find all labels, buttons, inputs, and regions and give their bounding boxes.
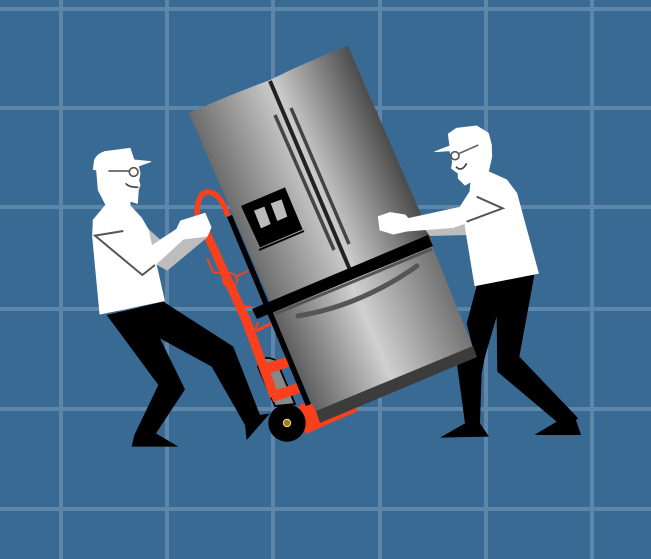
hand truck — [197, 192, 358, 442]
fridge middle band — [252, 235, 433, 319]
hand truck base plate — [298, 403, 358, 434]
hand truck cross bars — [259, 357, 300, 402]
right mover legs — [440, 272, 581, 438]
refrigerator — [189, 46, 477, 423]
hand truck handle hook — [197, 192, 228, 216]
hand truck braces — [207, 216, 272, 331]
hand truck wheel — [268, 404, 306, 442]
fridge door handles — [275, 108, 349, 250]
fridge lower door handle — [298, 266, 417, 316]
right mover upper body — [378, 126, 538, 286]
fridge upper doors — [189, 46, 431, 305]
left mover upper body — [93, 148, 211, 314]
fridge base strip — [316, 346, 477, 423]
fridge lower door trim — [275, 249, 432, 314]
fridge water dispenser — [241, 187, 304, 250]
hand truck motor cylinder — [258, 358, 295, 406]
fridge door seam — [270, 81, 350, 270]
fridge side strip — [230, 216, 308, 405]
hand truck rail — [197, 222, 279, 398]
fridge lower door — [268, 245, 474, 420]
left mover legs — [107, 302, 270, 447]
